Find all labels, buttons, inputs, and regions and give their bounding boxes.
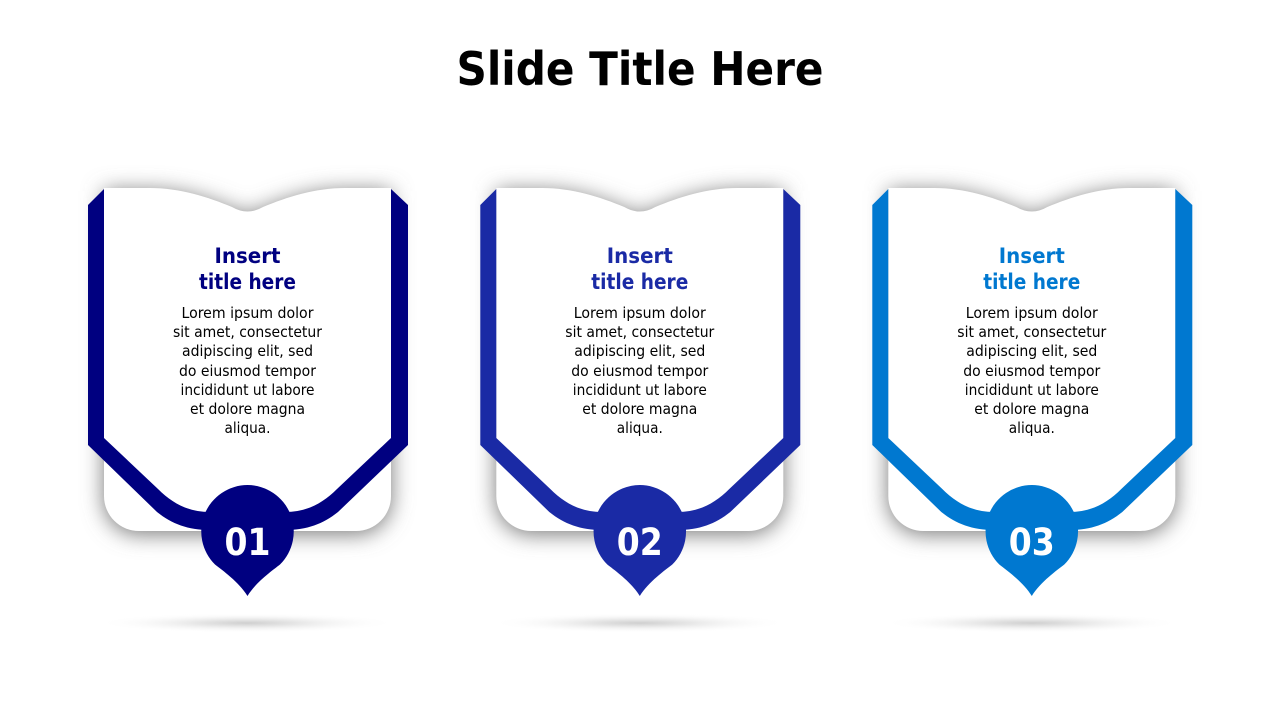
card body [496, 188, 783, 531]
frame [872, 189, 1192, 530]
body text: sit amet, consectetur [957, 323, 1107, 341]
body text: Lorem ipsum dolor [574, 304, 706, 322]
number badge [986, 485, 1078, 596]
card body [104, 188, 391, 531]
panel: card 02 [480, 188, 800, 633]
frame [480, 189, 800, 530]
number: 03 [1009, 521, 1055, 564]
card shadow [888, 191, 1175, 534]
number: 02 [617, 521, 663, 564]
body text: do eiusmod tempor [571, 362, 709, 380]
body text: et dolore magna [582, 400, 697, 418]
body text: et dolore magna [190, 400, 305, 418]
number badge [594, 485, 686, 596]
card shadow [496, 191, 783, 534]
body text: adipiscing elit, sed [182, 342, 313, 360]
body text: incididunt ut labore [573, 381, 707, 399]
frame [88, 189, 408, 530]
heading: Insert [214, 244, 280, 268]
heading: title here [591, 270, 688, 294]
heading: title here [983, 270, 1080, 294]
body text: aliqua. [1009, 419, 1055, 437]
body text: incididunt ut labore [965, 381, 1099, 399]
heading: Insert [999, 244, 1065, 268]
body text: sit amet, consectetur [173, 323, 322, 341]
floor shadow [881, 613, 1181, 633]
body text: sit amet, consectetur [565, 323, 715, 341]
body text: Lorem ipsum dolor [182, 304, 314, 322]
body text: do eiusmod tempor [963, 362, 1101, 380]
heading: title here [199, 270, 296, 294]
panel: card 01 [88, 188, 408, 633]
body text: aliqua. [224, 419, 270, 437]
panel: card 03 [872, 188, 1192, 633]
body text: do eiusmod tempor [179, 362, 316, 380]
card body [888, 188, 1175, 531]
body text: Lorem ipsum dolor [966, 304, 1098, 322]
number badge [201, 485, 294, 596]
floor shadow [489, 613, 789, 633]
floor shadow [97, 613, 397, 633]
body text: adipiscing elit, sed [574, 342, 705, 360]
body text: et dolore magna [974, 400, 1089, 418]
body text: incididunt ut labore [180, 381, 314, 399]
heading: Insert [607, 244, 673, 268]
title: Slide Title Here [456, 42, 824, 96]
body text: aliqua. [617, 419, 663, 437]
body text: adipiscing elit, sed [966, 342, 1097, 360]
card shadow [104, 191, 391, 534]
number: 01 [224, 521, 270, 564]
